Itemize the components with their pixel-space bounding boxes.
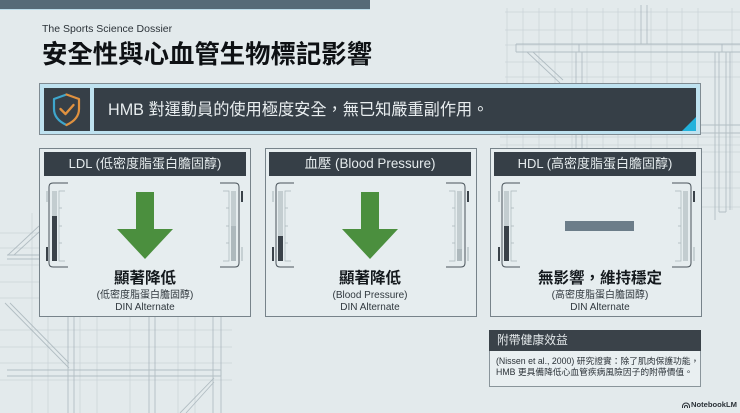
note body: HMB 更具備降低心血管疾病風險因子的附帶價值。 xyxy=(496,367,693,377)
panel: HDL xyxy=(490,148,702,317)
LDL gauges and arrow xyxy=(46,182,243,268)
HDL heading: HDL (高密度脂蛋白膽固醇) xyxy=(518,156,672,171)
title: 安全性與心血管生物標記影響 xyxy=(42,41,372,69)
LDL caption: DIN Alternate xyxy=(115,302,175,313)
note heading xyxy=(489,330,701,351)
note heading: 附帶健康效益 xyxy=(497,333,568,347)
HDL subtitle: (高密度脂蛋白膽固醇) xyxy=(552,290,648,301)
HDL gauges and dash xyxy=(498,182,695,268)
top bar xyxy=(0,0,370,10)
icon box with shield xyxy=(44,88,90,131)
panel: LDL xyxy=(39,148,251,317)
blood pressure subtitle: (Blood Pressure) xyxy=(332,290,408,301)
blood pressure result: 顯著降低 xyxy=(339,270,401,287)
NotebookLM mark: NotebookLM xyxy=(691,400,737,409)
blood pressure caption: DIN Alternate xyxy=(340,302,400,313)
blood pressure gauges and arrow xyxy=(272,182,469,268)
panel: blood pressure xyxy=(265,148,477,317)
panel: safety banner xyxy=(39,83,701,135)
LDL subtitle: (低密度脂蛋白膽固醇) xyxy=(97,290,193,301)
HDL result: 無影響，維持穩定 xyxy=(538,270,662,287)
note body xyxy=(496,356,699,377)
note body: (Nissen et al., 2000) 研究證實：除了肌肉保護功能， xyxy=(496,356,699,366)
LDL heading: LDL (低密度脂蛋白膽固醇) xyxy=(69,156,221,171)
icon: shield check xyxy=(52,93,80,126)
banner message xyxy=(94,88,696,131)
LDL result: 顯著降低 xyxy=(114,270,176,287)
HDL caption: DIN Alternate xyxy=(570,302,630,313)
blood pressure heading: 血壓 (Blood Pressure) xyxy=(304,156,435,171)
HDL heading xyxy=(494,152,696,176)
corner accent xyxy=(682,117,696,131)
blood pressure heading xyxy=(269,152,471,176)
eyebrow text: The Sports Science Dossier xyxy=(42,23,172,35)
LDL heading xyxy=(44,152,246,176)
banner text: HMB 對運動員的使用極度安全，無已知嚴重副作用。 xyxy=(108,101,488,119)
panel: additional health benefits xyxy=(489,330,701,387)
